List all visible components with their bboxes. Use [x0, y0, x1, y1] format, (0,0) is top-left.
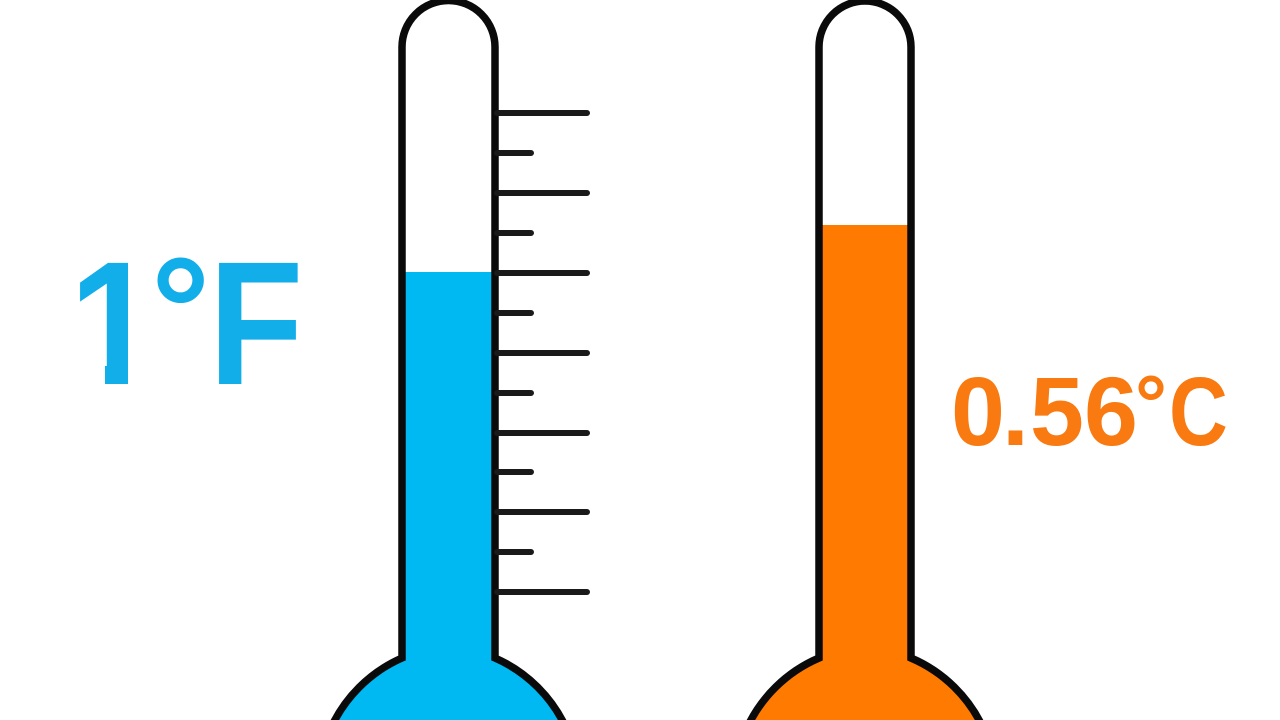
orange thermometer outline [746, 1, 984, 720]
label: 0.56°C: C [1169, 357, 1228, 466]
thermometer: Fahrenheit blue [330, 0, 567, 720]
orange liquid [746, 225, 984, 720]
label: 1°F: ° [151, 228, 210, 392]
label: 0.56°C: ° [1135, 359, 1167, 448]
label: 1°F: 1 [69, 225, 159, 421]
thermometer: Celsius orange [746, 1, 984, 720]
label: 0.56°C [951, 357, 1228, 466]
label: 0.56°C: 0.56 [951, 357, 1138, 466]
label: 1°F [80, 258, 298, 384]
blue thermometer outline [330, 0, 567, 720]
label: 1°F: F [209, 226, 303, 422]
scale ticks [497, 113, 587, 592]
blue liquid [330, 272, 567, 720]
